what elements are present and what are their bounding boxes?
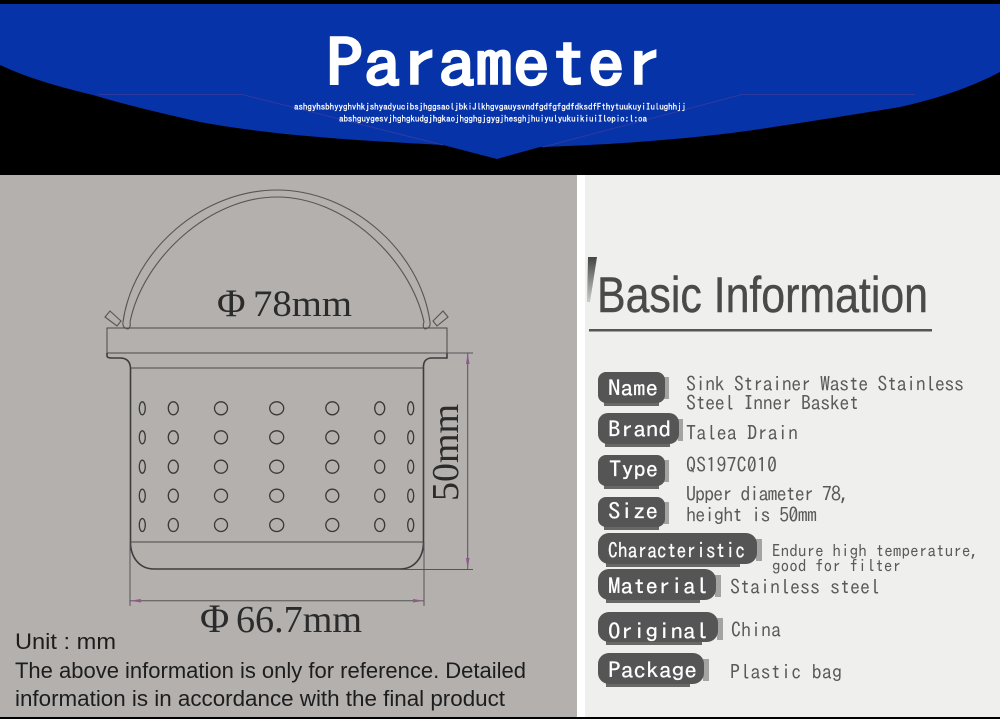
row: type bbox=[598, 455, 777, 489]
dimension lines bbox=[130, 353, 473, 606]
row: material: Material bbox=[608, 575, 708, 597]
note text: Unit : mm bbox=[15, 629, 116, 654]
dimension: lower diameter: Φ bbox=[200, 596, 229, 641]
dimension: upper diameter: 78mm bbox=[253, 284, 352, 325]
heading underline bbox=[589, 329, 932, 332]
row: size: Size bbox=[608, 500, 658, 522]
row: characteristic bbox=[598, 533, 979, 575]
row: name: Name bbox=[608, 377, 658, 399]
basket body bbox=[107, 328, 447, 569]
basket handle bbox=[105, 190, 448, 329]
note text: The above information is only for reference. Detailed bbox=[15, 658, 526, 683]
row: size: height is 50mm bbox=[686, 505, 817, 525]
row: name: Steel Inner Basket bbox=[686, 393, 859, 413]
row: type: Type bbox=[609, 458, 658, 480]
row: brand: Brand bbox=[608, 418, 671, 440]
subtitle text: ashgyhsbhyyghvhkjshyadyucibsjhggsaoljbkiJlkhgvgauysvndfgdfgfgdfdksdfFthytuukuyiIulughhjj bbox=[294, 103, 686, 112]
subtitle text bbox=[294, 103, 686, 124]
dimension: height: 50mm bbox=[425, 404, 467, 501]
heading: Basic Information bbox=[597, 267, 928, 323]
row: package bbox=[598, 653, 842, 687]
row: characteristic: good for filter bbox=[772, 558, 901, 575]
row: name: Sink Strainer Waste Stainless bbox=[686, 374, 964, 394]
subtitle text: abshguygesvjhghgkudgjhgkaojhgghgjgygjhesghjhuiyulyukuikiuiIlopio:l:oa bbox=[339, 115, 648, 124]
header band bbox=[0, 0, 1000, 175]
row: material: Stainless steel bbox=[730, 577, 880, 597]
panel: basic information bbox=[577, 175, 1000, 717]
row: characteristic: Characteristic bbox=[608, 540, 745, 561]
row: package: Plastic bag bbox=[730, 662, 842, 682]
row: size bbox=[598, 484, 850, 530]
note text bbox=[15, 629, 526, 711]
dimension: upper diameter: Φ bbox=[217, 282, 246, 325]
perforation holes bbox=[139, 402, 414, 532]
row: original: China bbox=[731, 620, 781, 640]
row: name bbox=[598, 372, 964, 413]
row: original: Original bbox=[608, 620, 708, 642]
row: original bbox=[598, 612, 781, 645]
row: package: Package bbox=[608, 659, 697, 681]
note text: information is in accordance with the final product bbox=[15, 686, 506, 711]
row: material bbox=[598, 569, 880, 603]
title: Parameter bbox=[326, 29, 662, 95]
dimension: lower diameter: 66.7mm bbox=[236, 599, 362, 641]
row: characteristic: Endure high temperature, bbox=[772, 543, 979, 560]
heading accent slash bbox=[587, 257, 597, 302]
row: type: QS197C010 bbox=[686, 455, 777, 475]
row: brand bbox=[598, 413, 798, 447]
row: brand: Talea Drain bbox=[686, 423, 798, 443]
row: size: Upper diameter 78, bbox=[686, 484, 850, 504]
panel: technical drawing bbox=[0, 175, 577, 717]
